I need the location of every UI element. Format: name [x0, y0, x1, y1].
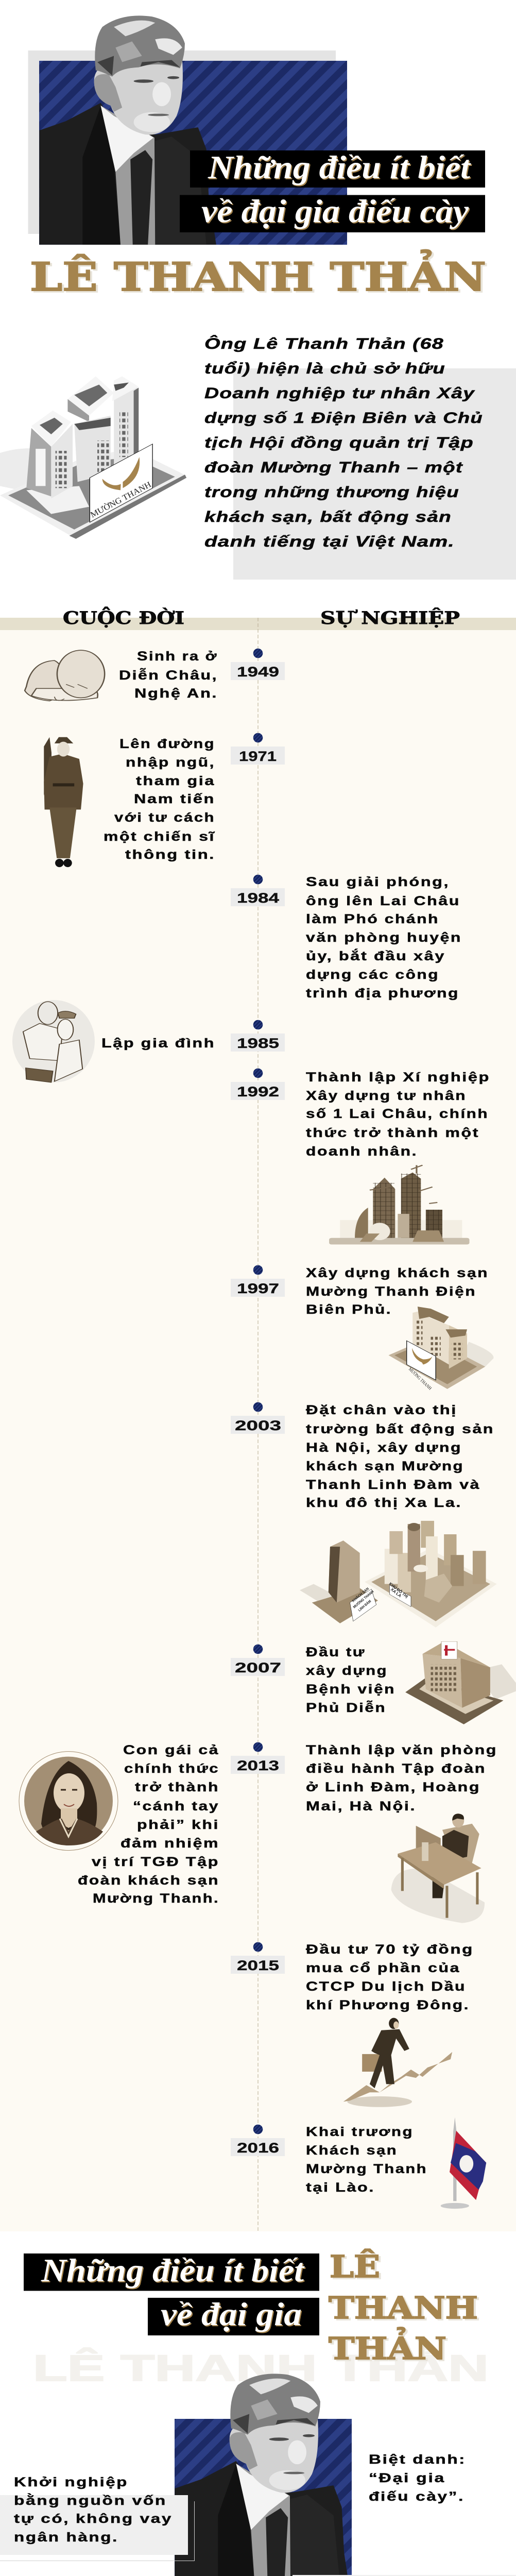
hero background panels: [28, 50, 347, 245]
year marker 2007: 2007: [235, 1660, 281, 1675]
year marker 1997: [231, 1265, 285, 1297]
event text: Điện Biên hotel: Xây dựng khách sạn: [306, 1266, 489, 1280]
icon: couple: [12, 1000, 95, 1082]
event text: hospital: Phủ Diễn: [306, 1700, 386, 1715]
event text: founded enterprise: Thành lập Xí nghiệp: [306, 1070, 490, 1084]
event text: Điện Biên hotel: Mường Thanh Điện: [306, 1284, 476, 1299]
event text: 70 billion investment: [306, 1942, 474, 2012]
year marker 1971: [231, 733, 285, 765]
heading: Cuộc đời: CUỘC ĐỜI: [63, 606, 184, 629]
event text: Lai Châu: [306, 875, 462, 1001]
year marker 2016: [231, 2125, 285, 2156]
event text: hospital: [306, 1645, 395, 1715]
year marker 1949: [231, 649, 285, 680]
headline strip 2: [148, 2296, 319, 2335]
event text: Lai Châu: Sau giải phóng,: [306, 875, 450, 889]
event text: born: Diễn Châu,: [119, 667, 218, 683]
event text: Laos hotel: [306, 2125, 427, 2195]
icon: Linh Đàm and Xa La city: KHU ĐÔ THỊ: [388, 1581, 409, 1599]
event text: hospital: Đầu tư: [306, 1645, 366, 1659]
year marker 2013: [231, 1742, 285, 1774]
icon: Mường Thanh hotel building: MƯỜNG THANH: [89, 479, 153, 520]
watermark name: LÊ THANH THẢN: [33, 2348, 489, 2389]
event text: 70 billion investment: mua cổ phần của: [306, 1961, 460, 1975]
event text: Lai Châu: làm Phó chánh: [306, 912, 439, 926]
event text: enlisted: nhập ngũ,: [126, 755, 215, 770]
intro paragraph: dựng số 1 Điện Biên và Chủ: [204, 410, 483, 427]
headline strip 1: Những điều ít biết: [41, 2252, 305, 2289]
icon: baby: [25, 650, 105, 701]
fact: nickname: Biệt danh:: [369, 2452, 466, 2467]
fact: self-funded: [0, 2475, 195, 2561]
event text: enlisted: Lên đường: [119, 737, 215, 751]
fact: self-funded: ngân hàng.: [14, 2530, 118, 2545]
event text: daughter: phải” khi: [137, 1818, 219, 1832]
year marker 2015: [231, 1942, 285, 1974]
year marker 1971: 1971: [239, 749, 277, 764]
year marker 2003: [231, 1402, 285, 1434]
event text: daughter: chính thức: [124, 1761, 219, 1776]
icon: man at office desk: [391, 1814, 485, 1923]
icon: Linh Đàm and Xa La city: XA LA: [390, 1587, 402, 1598]
event text: Laos hotel: tại Lào.: [306, 2180, 375, 2195]
event text: Laos hotel: Mường Thanh: [306, 2162, 427, 2176]
event text: enlisted: thông tin.: [125, 848, 215, 862]
icon: businessman climbing chart: [343, 2018, 452, 2107]
icon: Linh Đàm and Xa La city: [300, 1521, 497, 1628]
event text: Hanoi real estate: Đặt chân vào thị: [306, 1403, 457, 1417]
event text: head office: ở Linh Đàm, Hoàng: [306, 1780, 480, 1794]
timeline panel: [0, 606, 516, 2231]
icon: Laos flag: [441, 2117, 486, 2209]
event text: Lai Châu: trình địa phương: [306, 986, 459, 1001]
event text: Lai Châu: dựng các công: [306, 968, 439, 982]
icon: construction site: [329, 1165, 470, 1245]
fact: smokes pipe tobacco: [286, 2575, 516, 2576]
portrait: Lê Thanh Thản: [175, 2374, 352, 2576]
fact: self-funded: tự có, không vay: [14, 2512, 173, 2526]
event text: enlisted: với tư cách: [114, 810, 215, 825]
year marker 2015: 2015: [237, 1958, 279, 1973]
event text: daughter: vị trí TGĐ Tập: [92, 1855, 219, 1869]
headline strip 1: Những điều ít biết: [208, 149, 471, 185]
event text: head office: Mai, Hà Nội.: [306, 1799, 416, 1814]
event text: 70 billion investment: Đầu tư 70 tỷ đồng: [306, 1942, 474, 1957]
name title: LÊ THANH THẢN: [30, 249, 486, 300]
year marker 1985: 1985: [237, 1036, 279, 1051]
event text: daughter: Mường Thanh.: [93, 1891, 219, 1906]
year marker 1984: 1984: [237, 890, 279, 906]
intro paragraph: Ông Lê Thanh Thản (68: [204, 335, 444, 352]
portrait: Lê Thanh Thản: [39, 15, 216, 245]
intro section: [0, 335, 516, 580]
event text: founded enterprise: số 1 Lai Châu, chính: [306, 1107, 489, 1121]
event text: hospital: Bệnh viện: [306, 1682, 395, 1697]
fact: self-funded: bằng nguồn vốn: [14, 2493, 167, 2508]
year marker 1997: 1997: [237, 1281, 279, 1296]
icon: Linh Đàm and Xa La city: MƯỜNG THANH: [352, 1589, 375, 1609]
fact: nickname: [369, 2452, 466, 2504]
icon: Linh Đàm and Xa La city: LINH ĐÀM: [357, 1599, 372, 1613]
blue panel behind portrait: [175, 2419, 352, 2576]
event text: founded enterprise: Xây dựng tư nhân: [306, 1089, 467, 1103]
intro paragraph: tịch Hội đồng quản trị Tập: [204, 434, 474, 451]
year marker 2007: [231, 1645, 285, 1676]
event text: Hanoi real estate: [306, 1403, 494, 1510]
fact: nickname: điếu cày”.: [369, 2489, 465, 2504]
icon: sepia hotel: [388, 1307, 493, 1391]
icon: Mường Thanh hotel building: [0, 376, 186, 539]
event text: Lai Châu: ông lên Lai Châu: [306, 894, 460, 908]
event text: head office: [306, 1743, 497, 1814]
event text: hospital: xây dựng: [306, 1664, 388, 1678]
year marker 2016: 2016: [237, 2140, 279, 2156]
heading: Sự nghiệp: SỰ NGHIỆP: [320, 607, 460, 629]
headline strip 2: về đại gia: [161, 2296, 302, 2332]
year marker 2013: 2013: [237, 1758, 279, 1773]
icon: Linh Đàm and Xa La city: KHÁCH SẠN: [351, 1586, 370, 1603]
intro paragraph: Doanh nghiệp tư nhân Xây: [204, 385, 475, 402]
icon: soldier: [44, 737, 83, 867]
event text: Hanoi real estate: Hà Nội, xây dựng: [306, 1440, 462, 1455]
event text: Hanoi real estate: Thanh Linh Đàm và: [306, 1478, 480, 1492]
icon: hospital: [405, 1641, 516, 1724]
intro paragraph: đoàn Mường Thanh – một: [204, 459, 463, 476]
event text: Lai Châu: văn phòng huyện: [306, 930, 462, 945]
stacked name: THANH: [329, 2290, 478, 2326]
event text: born: Sinh ra ở: [137, 649, 218, 664]
event text: daughter: “cánh tay: [133, 1799, 219, 1814]
event text: daughter: [78, 1743, 219, 1906]
year marker 1984: [231, 875, 285, 906]
event text: Laos hotel: Khách sạn: [306, 2143, 398, 2158]
portrait: daughter: [19, 1752, 118, 1851]
event text: Điện Biên hotel: Biên Phủ.: [306, 1302, 392, 1317]
event text: enlisted: [104, 737, 215, 862]
event text: 70 billion investment: CTCP Du lịch Dầu: [306, 1979, 466, 1994]
stacked name: [329, 2248, 478, 2366]
event text: enlisted: Nam tiến: [134, 792, 215, 806]
stacked name: LÊ: [330, 2248, 380, 2284]
event text: enlisted: tham gia: [136, 774, 215, 788]
icon: sepia hotel: MƯỜNG THANH: [408, 1366, 433, 1391]
event text: daughter: Con gái cả: [123, 1743, 219, 1757]
stacked name: THẢN: [329, 2327, 446, 2366]
intro paragraph: khách sạn, bất động sản: [204, 509, 452, 526]
event text: born: Nghệ An.: [134, 686, 218, 701]
intro paragraph: tuổi) hiện là chủ sở hữu: [204, 360, 445, 377]
year marker 1949: 1949: [237, 664, 279, 680]
event text: daughter: đoàn khách sạn: [78, 1873, 219, 1888]
event text: married: Lập gia đình: [101, 1036, 215, 1050]
hero: portrait and title: [28, 15, 486, 300]
intro paragraph: danh tiếng tại Việt Nam.: [204, 533, 455, 550]
event text: born: [119, 649, 218, 701]
intro paragraph: [204, 335, 483, 550]
year marker 1992: 1992: [237, 1084, 279, 1099]
year marker 1985: [231, 1020, 285, 1052]
event text: daughter: trở thành: [135, 1780, 219, 1794]
event text: enlisted: một chiến sĩ: [104, 829, 215, 844]
timeline background: [0, 618, 516, 2231]
event text: Laos hotel: Khai trương: [306, 2125, 414, 2139]
event text: founded enterprise: thức trở thành một: [306, 1126, 479, 1140]
section: little-known facts: [0, 2248, 516, 2576]
event text: Điện Biên hotel: [306, 1266, 489, 1317]
event text: Hanoi real estate: khách sạn Mường: [306, 1459, 464, 1473]
event text: Hanoi real estate: khu đô thị Xa La.: [306, 1496, 462, 1510]
fact: self-funded: Khởi nghiệp: [14, 2475, 128, 2489]
event text: founded enterprise: [306, 1070, 490, 1159]
event text: 70 billion investment: khí Phương Đông.: [306, 1998, 470, 2012]
event text: daughter: đảm nhiệm: [121, 1836, 219, 1851]
event text: Hanoi real estate: trường bất động sản: [306, 1422, 494, 1436]
event text: Lai Châu: ủy, bắt đầu xây: [306, 948, 445, 963]
intro grey panel: [233, 368, 516, 580]
event text: head office: điều hành Tập đoàn: [306, 1761, 486, 1776]
headline strip 2: về đại gia điếu cày: [201, 193, 469, 229]
intro paragraph: trong những thương hiệu: [204, 484, 459, 501]
year marker 1992: [231, 1069, 285, 1100]
fact: nickname: “Đại gia: [369, 2471, 445, 2485]
event text: head office: Thành lập văn phòng: [306, 1743, 497, 1757]
event text: founded enterprise: doanh nhân.: [306, 1144, 418, 1159]
year marker 2003: 2003: [235, 1418, 281, 1433]
